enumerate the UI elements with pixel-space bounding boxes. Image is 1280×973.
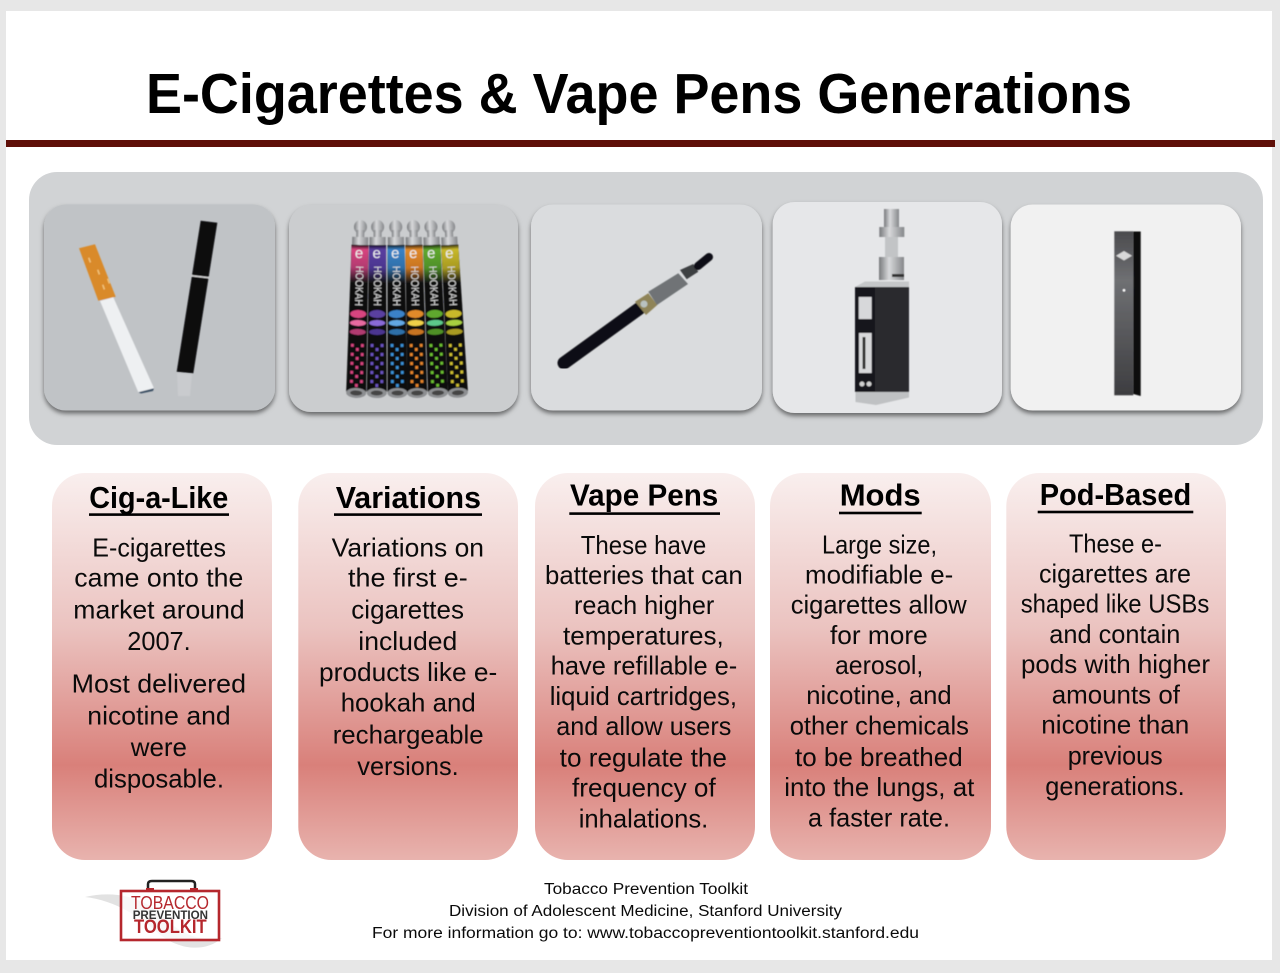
photo: pod device [1011, 204, 1241, 410]
text: Mods description: nicotine, and [806, 680, 952, 710]
text: Cig-a-Like description: E-cigarettes [92, 533, 226, 563]
text: Cig-a-Like description [72, 533, 246, 793]
pen: orange: HOOKAH [408, 266, 421, 306]
text: Mods description: a faster rate. [808, 803, 950, 833]
pen: blue [386, 220, 408, 398]
text: Vape Pens description: frequency of [572, 773, 716, 803]
heading: Cig-a-Like: Cig-a-Like [89, 480, 228, 515]
panel: product photos [29, 172, 1263, 445]
text: Mods description: other chemicals [790, 710, 969, 740]
text: Mods description: for more [830, 620, 928, 650]
footer credits [372, 881, 919, 942]
photo: e-hookah variations [289, 205, 518, 412]
text: Pod-Based description: and contain [1049, 619, 1180, 649]
panel: Vape Pens [535, 473, 755, 860]
text: Vape Pens description: to regulate the [560, 743, 727, 773]
logo: Tobacco Prevention Toolkit: TOBACCO [131, 893, 209, 913]
text: Mods description: aerosol, [835, 650, 923, 680]
text: Vape Pens description: inhalations. [579, 803, 708, 833]
heading: Mods: Mods [840, 478, 921, 513]
text: Cig-a-Like description: disposable. [94, 763, 224, 793]
text: Mods description: into the lungs, at [784, 772, 975, 802]
text: Vape Pens description: liquid cartridges, [550, 681, 737, 711]
pen: blue: e [391, 245, 399, 262]
heading: Pod-Based: Pod-Based [1040, 477, 1191, 512]
heading: Vape Pens: Vape Pens [570, 478, 718, 513]
text: Pod-Based description: generations. [1045, 771, 1185, 801]
pen: green [421, 220, 448, 398]
pen: pink [346, 220, 371, 398]
pen: pink: e [355, 245, 363, 262]
text: Variations description: included [358, 626, 457, 656]
text: Pod-Based description: amounts of [1052, 679, 1181, 709]
pen: green: e [427, 245, 436, 262]
text: Vape Pens description [545, 530, 743, 833]
footer credits: Division of Adolescent Medicine, Stanford University [449, 903, 842, 920]
pen: purple: e [372, 245, 381, 262]
text: Vape Pens description: temperatures, [563, 620, 724, 650]
text: Pod-Based description: These e- [1069, 528, 1162, 558]
text: Cig-a-Like description: were [130, 732, 187, 762]
footer credits: Tobacco Prevention Toolkit [544, 881, 749, 898]
photo: vape pen [531, 204, 762, 410]
logo: Tobacco Prevention Toolkit [85, 881, 222, 948]
pen: yellow [438, 219, 468, 398]
text: Cig-a-Like description: Most delivered [72, 668, 246, 698]
photo: cig-a-like devices [44, 204, 275, 410]
text: Variations description: cigarettes [351, 594, 464, 624]
text: Vape Pens description: have refillable e- [551, 651, 737, 681]
text: Vape Pens description: batteries that can [545, 560, 743, 590]
text: Cig-a-Like description: market around [73, 594, 245, 624]
logo: Tobacco Prevention Toolkit: TOOLKIT [134, 917, 207, 938]
text: Cig-a-Like description: 2007. [127, 626, 191, 656]
text: Mods description: modifiable e- [805, 559, 953, 589]
pen: blue: HOOKAH [390, 266, 402, 306]
footer credits: For more information go to: www.tobaccopreventiontoolkit.stanford.edu [372, 925, 919, 942]
text: Pod-Based description: shaped like USBs [1021, 589, 1209, 619]
panel: Variations [298, 473, 518, 860]
text: Vape Pens description: These have [581, 530, 706, 560]
text: Mods description: to be breathed [795, 742, 963, 772]
text: Variations description: hookah and [341, 688, 476, 718]
text: Cig-a-Like description: nicotine and [87, 700, 231, 730]
pen: orange: e [409, 245, 418, 262]
text: Mods description: cigarettes allow [791, 589, 967, 619]
pen: yellow: e [445, 245, 454, 262]
text: Variations description: Variations on [332, 533, 484, 563]
pen: yellow: HOOKAH [444, 266, 459, 306]
title rule [6, 140, 1275, 147]
pen: purple [367, 220, 388, 398]
text: Variations description: the first e- [348, 563, 468, 593]
panel: Pod-Based [1006, 473, 1226, 860]
text: Variations description: products like e- [319, 657, 497, 687]
pen: pink: HOOKAH [352, 266, 365, 306]
panel: Mods [770, 473, 991, 860]
logo: Tobacco Prevention Toolkit: PREVENTION [133, 908, 208, 922]
text: Pod-Based description: nicotine than [1041, 710, 1189, 740]
text: Vape Pens description: and allow users [556, 711, 731, 741]
pen: purple: HOOKAH [371, 266, 383, 306]
text: Pod-Based description: pods with higher [1021, 649, 1210, 679]
text: Pod-Based description: cigarettes are [1039, 558, 1191, 588]
text: Pod-Based description: previous [1068, 740, 1163, 770]
panel: Cig-a-Like [52, 473, 272, 860]
photo: box mod [773, 202, 1002, 413]
text: Mods description: Large size, [822, 529, 937, 559]
text: Variations description: rechargeable [333, 719, 484, 749]
text: Pod-Based description [1021, 528, 1210, 801]
text: Cig-a-Like description: came onto the [74, 563, 243, 593]
text: Variations description [319, 533, 497, 781]
text: Vape Pens description: reach higher [574, 590, 715, 620]
text: Variations description: versions. [357, 751, 459, 781]
pen: green: HOOKAH [426, 266, 440, 306]
title: E-Cigarettes & Vape Pens Generations [146, 62, 1132, 126]
heading: Variations: Variations [336, 480, 481, 515]
text: Mods description [784, 529, 975, 833]
pen: orange [403, 220, 427, 398]
